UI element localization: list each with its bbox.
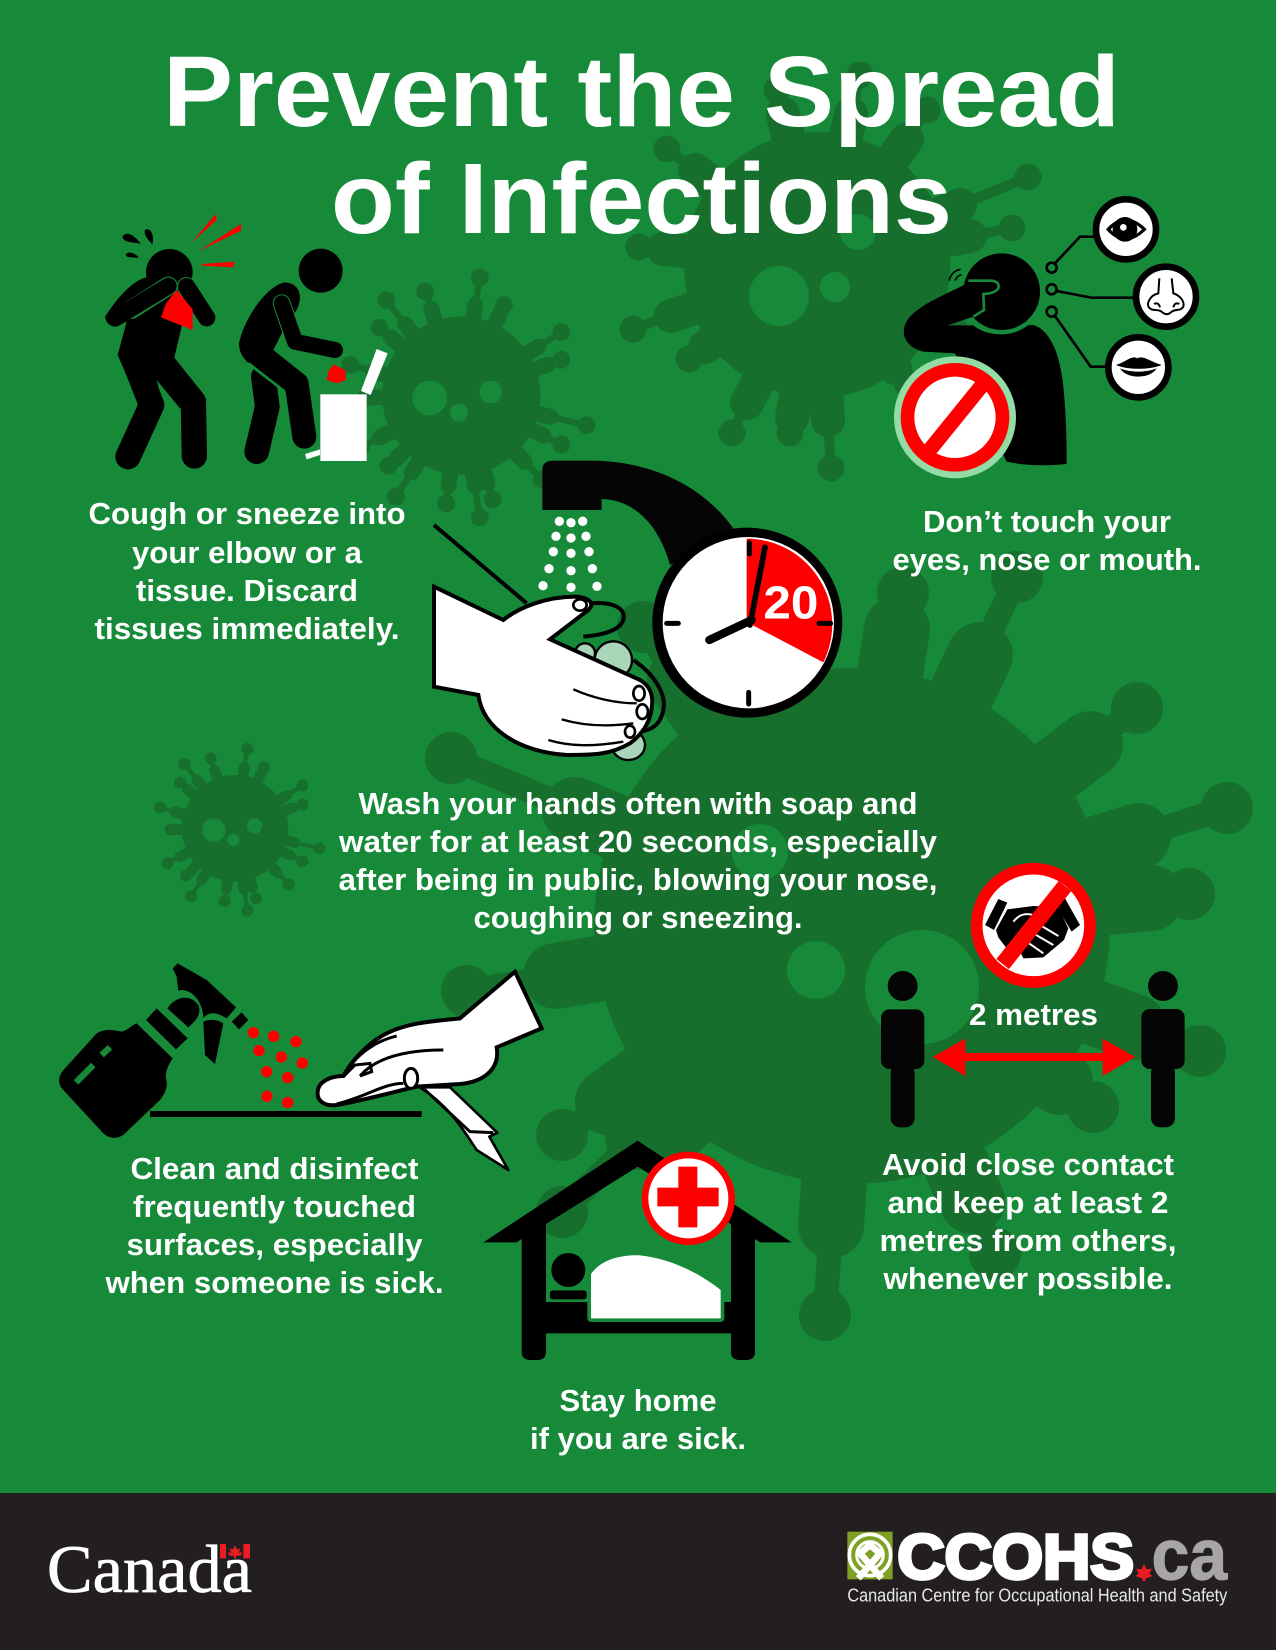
icon: house with bed and medical cross <box>483 1141 792 1360</box>
tagline: Canadian Centre for Occupational Health and Safety <box>847 1585 1228 1606</box>
icon: hand washing with faucet and clock <box>434 461 842 760</box>
hands <box>434 525 664 755</box>
text: cough or sneeze <box>88 496 406 646</box>
clock: 20 <box>763 576 818 628</box>
icon: person touching face <box>894 199 1196 478</box>
text: wash hands: Wash your hands often with soap and <box>358 786 918 821</box>
hand <box>318 972 542 1133</box>
CCOHS emblem <box>847 1532 893 1579</box>
CCOHS wordmark: CCOHS <box>897 1522 1134 1592</box>
flag <box>220 1544 250 1558</box>
background virus: middle <box>350 278 587 517</box>
spray bottle <box>59 963 248 1138</box>
text: stay home <box>530 1383 746 1456</box>
medical cross badge <box>645 1155 732 1242</box>
text: clean and disinfect: Clean and disinfect <box>130 1151 418 1186</box>
text: wash hands: coughing or sneezing. <box>474 900 802 935</box>
text: avoid close contact: whenever possible. <box>882 1261 1172 1296</box>
figure discarding tissue <box>239 249 343 452</box>
label: 2 metres: 2 metres <box>969 997 1098 1032</box>
text: avoid close contact: and keep at least 2 <box>888 1185 1168 1220</box>
tissue and bin <box>305 349 388 461</box>
sneeze marks <box>122 214 241 267</box>
background virus: top <box>633 75 1028 468</box>
footer band <box>0 1493 1276 1650</box>
icon: mouth <box>1108 337 1168 397</box>
soap <box>575 641 645 760</box>
dot ca: ca <box>1152 1515 1228 1595</box>
text: avoid close contact <box>880 1147 1176 1296</box>
text: wash hands: after being in public, blowing your nose, <box>338 862 937 897</box>
text: cough or sneeze: tissue. Discard <box>136 573 358 608</box>
background virus: small <box>160 749 319 910</box>
text: don't touch <box>892 504 1202 577</box>
text: wash hands: water for at least 20 seconds, especially <box>338 824 938 859</box>
prohibition sign <box>894 356 1016 478</box>
clock <box>652 528 842 718</box>
title: of Infections <box>331 143 952 255</box>
faucet <box>542 461 733 565</box>
cloth <box>420 1087 508 1170</box>
text: wash hands <box>338 786 938 935</box>
sleeping person <box>550 1253 721 1318</box>
touching figure <box>904 253 1067 465</box>
text: clean and disinfect: when someone is sick. <box>104 1265 444 1300</box>
text: avoid close contact: metres from others, <box>880 1223 1176 1258</box>
text: stay home: if you are sick. <box>530 1421 746 1456</box>
title: Prevent the Spread <box>163 36 1120 148</box>
background virus: large <box>451 577 1227 1315</box>
maple leaf <box>1135 1564 1153 1581</box>
surface line <box>150 1111 422 1117</box>
house frame <box>483 1141 792 1360</box>
icon: physical distancing <box>881 869 1185 1127</box>
water drops <box>538 517 602 592</box>
logo: CCOHS.ca <box>847 1515 1228 1606</box>
text: avoid close contact: Avoid close contact <box>882 1147 1174 1182</box>
person right <box>1141 971 1185 1127</box>
text: don't touch: eyes, nose or mouth. <box>892 542 1202 577</box>
disinfectant drops <box>248 1027 308 1108</box>
icon: eye <box>1096 199 1156 259</box>
text: stay home: Stay home <box>560 1383 716 1418</box>
person left <box>881 971 924 1127</box>
text: cough or sneeze: Cough or sneeze into <box>88 496 406 531</box>
text: don't touch: Don’t touch your <box>923 504 1171 539</box>
logo: Canada wordmark: Canada <box>47 1531 252 1607</box>
connector lines <box>1047 237 1135 367</box>
no handshake sign <box>977 869 1090 982</box>
text: clean and disinfect: frequently touched <box>133 1189 416 1224</box>
icon: coughing person and tissue bin <box>105 214 388 461</box>
text: cough or sneeze: tissues immediately. <box>94 611 399 646</box>
icon: nose <box>1136 267 1196 327</box>
icon: spray bottle and cleaning hand <box>59 963 542 1170</box>
title <box>163 36 1120 255</box>
text: cough or sneeze: your elbow or a <box>132 535 363 570</box>
text: clean and disinfect <box>104 1151 444 1300</box>
distance arrow <box>933 1039 1135 1076</box>
coughing figure <box>105 249 207 457</box>
text: clean and disinfect: surfaces, especially <box>126 1227 423 1262</box>
